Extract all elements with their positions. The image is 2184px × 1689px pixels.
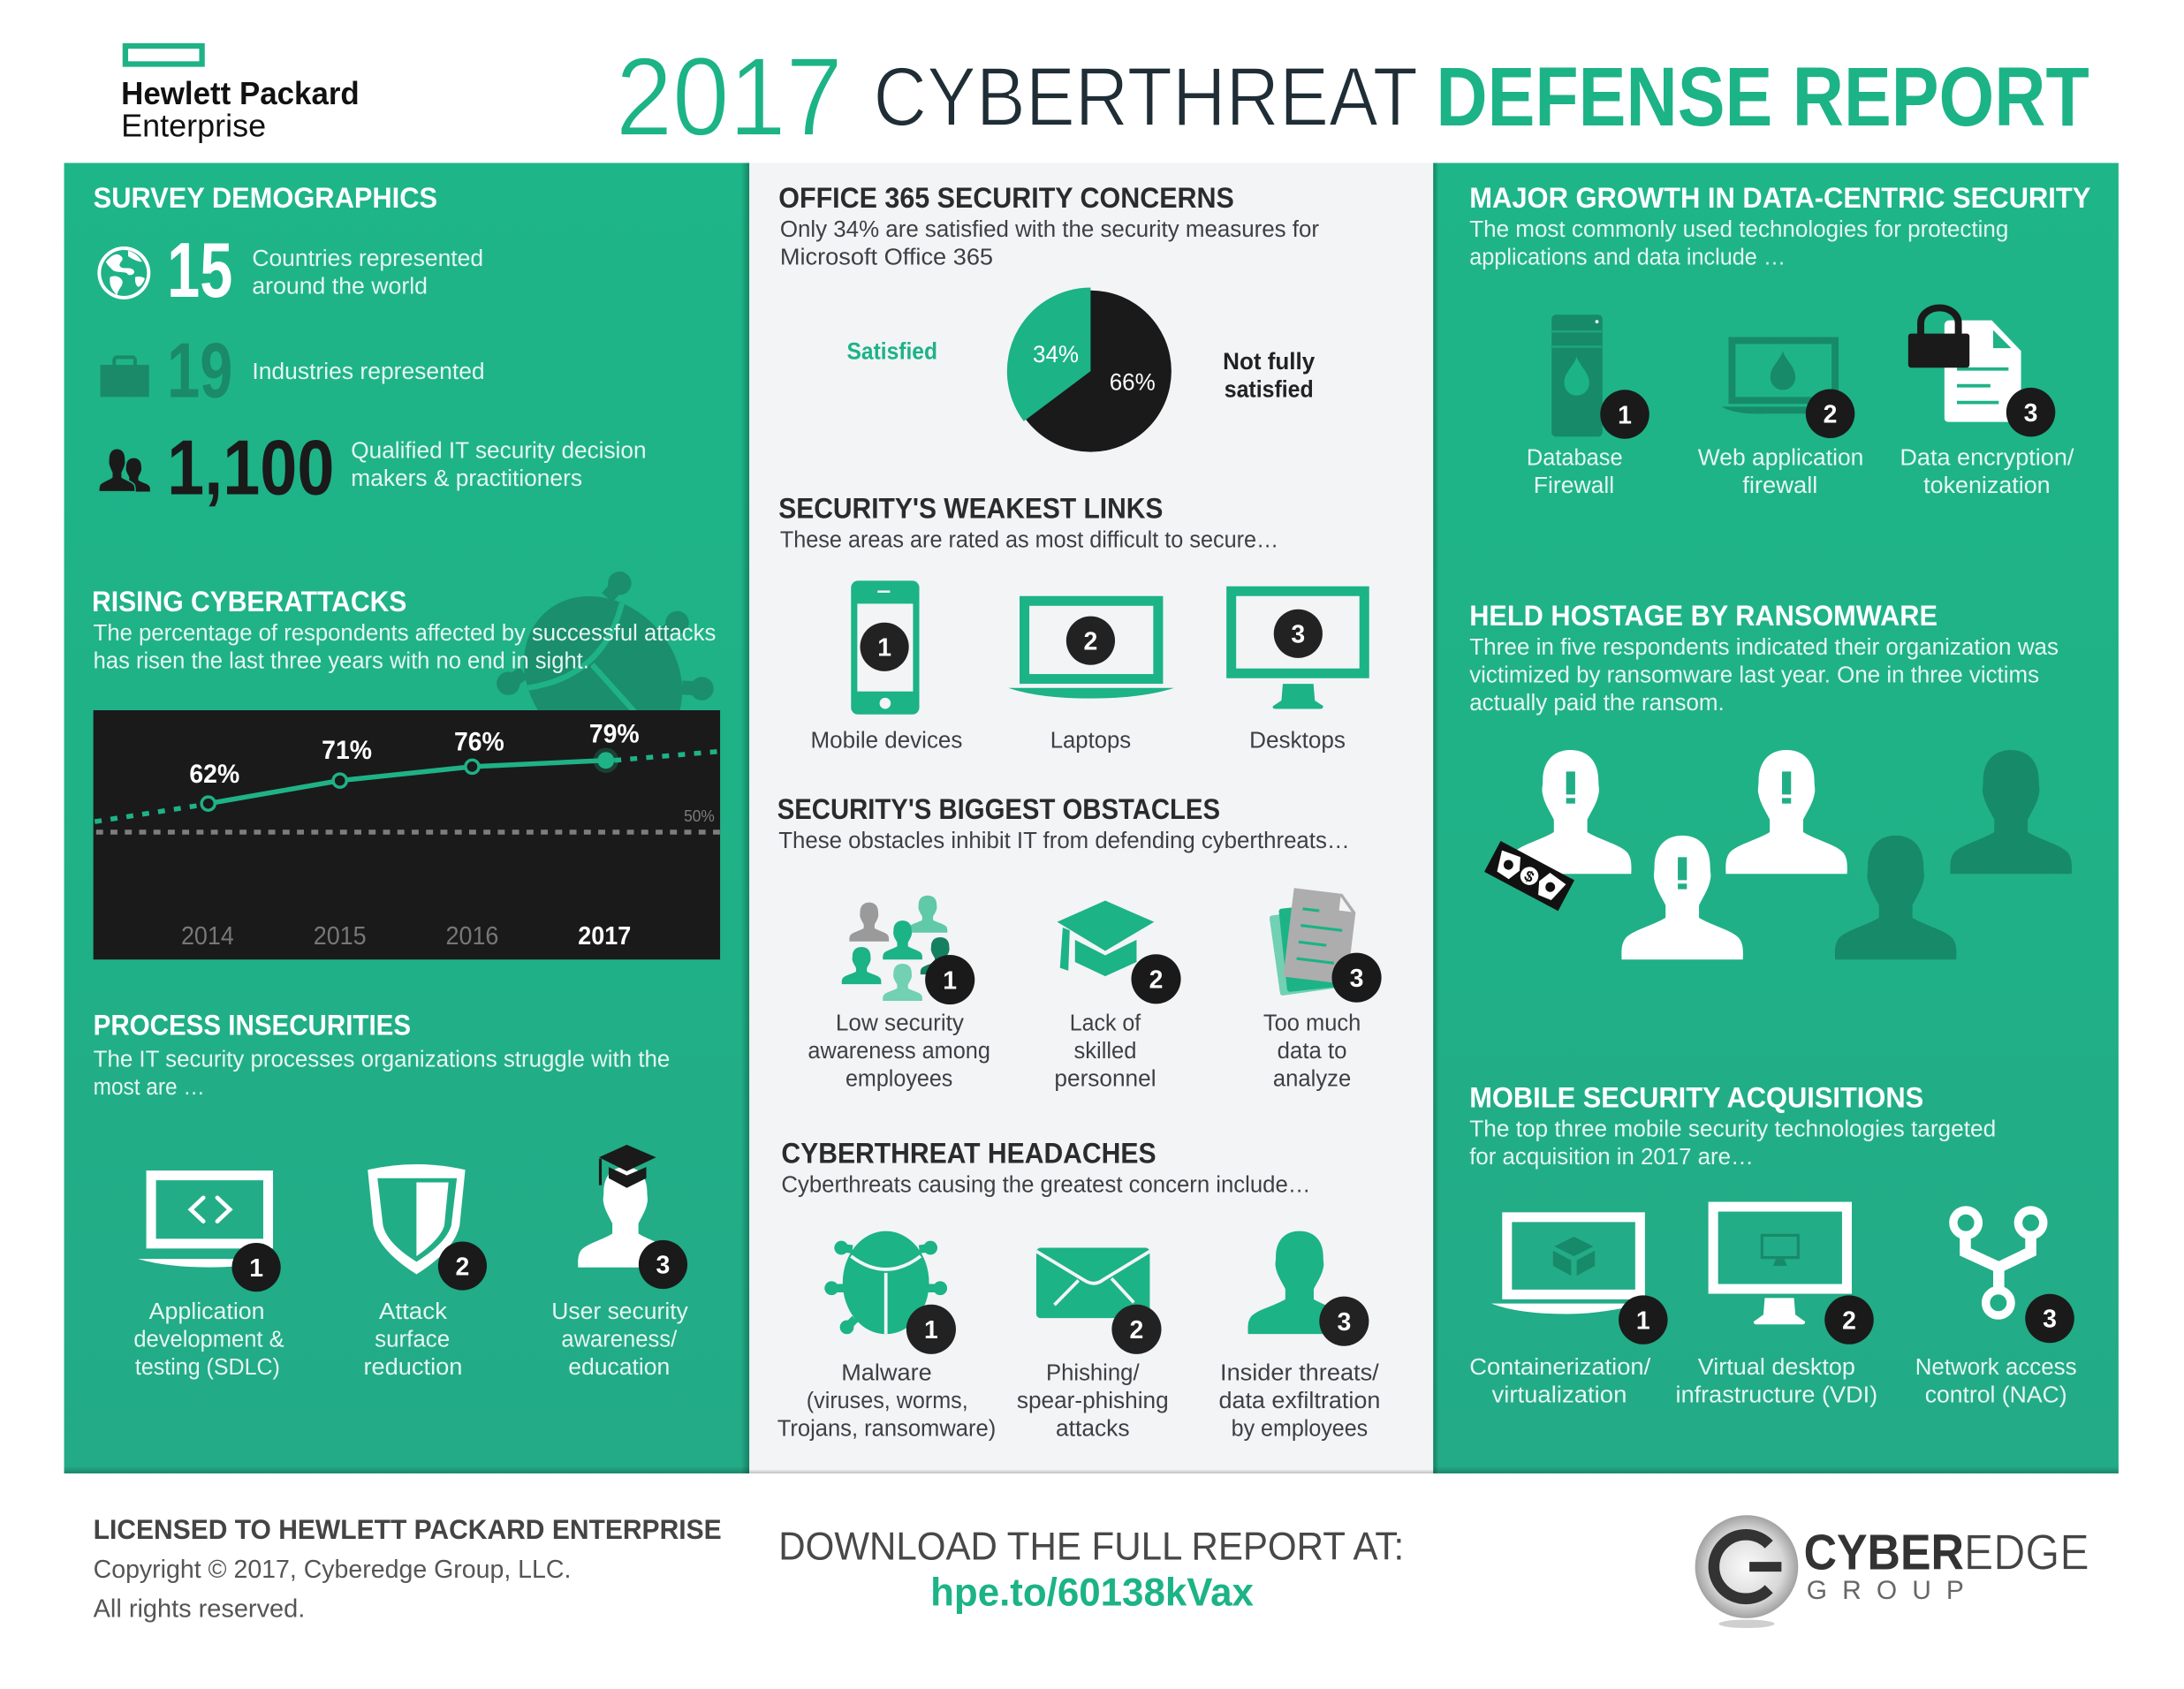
download call to action: hpe.to/60138kVax bbox=[930, 1572, 1254, 1615]
label: too much data: Too much bbox=[1263, 1010, 1361, 1036]
line chart: 2017 bbox=[578, 922, 631, 951]
logo: Cyberedge Group: EDGE bbox=[1964, 1526, 2089, 1581]
icon: laptop with container bbox=[1491, 1217, 1668, 1344]
pie chart: 66% bbox=[1110, 368, 1156, 395]
icon: encrypted document bbox=[1908, 307, 2055, 436]
logo: Cyberedge Group: GROUP bbox=[1807, 1576, 1964, 1605]
label: low security awareness bbox=[808, 1010, 990, 1092]
section: survey demographics bbox=[94, 182, 647, 511]
text block: Three in five respondents indicated their organization was bbox=[1469, 633, 2059, 660]
label: lack of skilled personnel bbox=[1054, 1010, 1156, 1092]
icon: documents bbox=[1270, 888, 1382, 1003]
icon: people victims bbox=[1510, 750, 2072, 959]
heading: MOBILE SECURITY ACQUISITIONS bbox=[1469, 1081, 1923, 1113]
icon: laptop: 2 bbox=[1084, 627, 1097, 655]
label: lack of skilled personnel: personnel bbox=[1054, 1065, 1156, 1092]
label: user security awareness: education bbox=[568, 1353, 670, 1380]
label: user security awareness: awareness/ bbox=[561, 1325, 678, 1352]
line chart: 50% bbox=[684, 807, 715, 825]
label: user security awareness: User security bbox=[551, 1298, 688, 1324]
text block: These obstacles inhibit IT from defending cyberthreats… bbox=[778, 827, 1350, 853]
label: insider threats: Insider threats/ bbox=[1220, 1359, 1380, 1385]
label: network access control: control (NAC) bbox=[1925, 1382, 2067, 1408]
heading: HELD HOSTAGE BY RANSOMWARE bbox=[1469, 600, 1938, 632]
label: malware: Trojans, ransomware) bbox=[777, 1414, 996, 1441]
stat: 15 countries: Countries represented bbox=[252, 245, 483, 271]
icon: briefcase bbox=[101, 357, 149, 397]
icon: money: $ bbox=[1521, 867, 1537, 886]
icon: encrypted document: 3 bbox=[2024, 399, 2037, 428]
label: malware: Malware bbox=[841, 1359, 932, 1385]
label: web application firewall: Web application bbox=[1698, 444, 1863, 471]
icon: envelope bbox=[1036, 1248, 1162, 1354]
text block: Microsoft Office 365 bbox=[780, 244, 993, 270]
label: application development bbox=[133, 1298, 284, 1380]
line chart: 79% bbox=[589, 719, 640, 748]
logo: Hewlett Packard Enterprise: Enterprise bbox=[121, 107, 266, 143]
panel: middle column bbox=[749, 163, 1433, 1473]
label: insider threats: by employees bbox=[1232, 1414, 1368, 1441]
label: low security awareness: Low security bbox=[836, 1010, 964, 1036]
label: attack surface reduction bbox=[363, 1298, 462, 1380]
text block: applications and data include … bbox=[1469, 244, 1786, 270]
icon: web application firewall bbox=[1722, 340, 1854, 438]
icon: employees bbox=[842, 896, 974, 1004]
label: application development: Application bbox=[149, 1298, 265, 1324]
heading: RISING CYBERATTACKS bbox=[92, 586, 406, 617]
label: not fully satisfied bbox=[1223, 348, 1315, 402]
icon: laptop code: 1 bbox=[249, 1254, 263, 1283]
label: lack of skilled personnel: skilled bbox=[1074, 1037, 1136, 1064]
icon: mobile: 1 bbox=[877, 634, 891, 663]
icon: laptop bbox=[1008, 601, 1174, 699]
download call to action bbox=[778, 1526, 1404, 1615]
text block: has risen the last three years with no end in sight. bbox=[94, 648, 589, 674]
license text: Copyright © 2017, Cyberedge Group, LLC. bbox=[94, 1556, 571, 1584]
label: data encryption: Data encryption/ bbox=[1900, 444, 2074, 471]
label: user security awareness bbox=[551, 1298, 688, 1380]
label: malware: (viruses, worms, bbox=[807, 1387, 968, 1413]
label: database firewall bbox=[1527, 444, 1623, 498]
stat: 1,100 practitioners: makers & practitioners bbox=[351, 465, 582, 491]
section: rising cyberattacks bbox=[92, 543, 738, 959]
panel: left column bbox=[64, 163, 749, 1473]
icon: network access control bbox=[1953, 1210, 2074, 1343]
label: phishing: Phishing/ bbox=[1046, 1359, 1140, 1385]
icon: malware bug: 1 bbox=[924, 1316, 938, 1344]
text block: The percentage of respondents affected by successful attacks bbox=[94, 619, 716, 646]
icon: insider person: 3 bbox=[1337, 1308, 1351, 1337]
text block: victimized by ransomware last year. One in three victims bbox=[1469, 661, 2039, 687]
section: office 365 bbox=[778, 182, 1319, 452]
logo: Hewlett Packard Enterprise bbox=[121, 46, 360, 143]
label: malware bbox=[777, 1359, 996, 1441]
icon: desktop bbox=[1232, 591, 1364, 708]
license text: All rights reserved. bbox=[94, 1594, 305, 1623]
download call to action: DOWNLOAD THE FULL REPORT AT: bbox=[778, 1526, 1404, 1569]
text block: These areas are rated as most difficult to secure… bbox=[780, 526, 1278, 553]
icon: laptop code bbox=[138, 1176, 281, 1291]
label: virtual desktop infrastructure: infrastructure (VDI) bbox=[1676, 1382, 1877, 1408]
label: web application firewall: firewall bbox=[1742, 472, 1817, 498]
label: virtual desktop infrastructure: Virtual desktop bbox=[1698, 1353, 1855, 1380]
heading: PROCESS INSECURITIES bbox=[94, 1009, 411, 1041]
section: mobile security acquisitions bbox=[1469, 1081, 2077, 1408]
label: laptops: Laptops bbox=[1050, 727, 1131, 754]
icon: envelope: 2 bbox=[1130, 1316, 1143, 1344]
stat: 15 countries: around the world bbox=[252, 273, 428, 299]
icon: desktop: 3 bbox=[1291, 621, 1305, 649]
label: attack surface reduction: Attack bbox=[379, 1298, 448, 1324]
label: database firewall: Firewall bbox=[1534, 472, 1614, 498]
header bbox=[121, 34, 2089, 159]
logo: Cyberedge Group bbox=[1695, 1515, 2089, 1628]
pie chart bbox=[1007, 288, 1172, 452]
line chart bbox=[94, 710, 720, 959]
line chart: 62% bbox=[189, 760, 239, 789]
heading: CYBERTHREAT HEADACHES bbox=[781, 1137, 1156, 1169]
text block bbox=[1469, 216, 2008, 270]
label: containerization: virtualization bbox=[1491, 1382, 1627, 1408]
icon: database firewall: 1 bbox=[1618, 401, 1632, 429]
icon: employees: 1 bbox=[943, 966, 957, 995]
icon: graduate: 3 bbox=[656, 1252, 670, 1280]
text block: Only 34% are satisfied with the security measures for bbox=[780, 216, 1319, 242]
heading: MAJOR GROWTH IN DATA-CENTRIC SECURITY bbox=[1469, 182, 2091, 214]
label: low security awareness: employees bbox=[846, 1065, 952, 1092]
icon: graduate bbox=[578, 1145, 687, 1289]
label: virtual desktop infrastructure bbox=[1676, 1353, 1877, 1408]
text block bbox=[94, 1046, 670, 1100]
icon: web application firewall: 2 bbox=[1824, 400, 1837, 428]
label: database firewall: Database bbox=[1527, 444, 1623, 471]
label: application development: testing (SDLC) bbox=[135, 1353, 280, 1380]
icon: database firewall bbox=[1551, 314, 1649, 439]
label: not fully satisfied: Not fully bbox=[1223, 348, 1315, 375]
label: network access control: Network access bbox=[1915, 1353, 2077, 1380]
icon: documents: 3 bbox=[1350, 965, 1363, 993]
label: insider threats bbox=[1218, 1359, 1380, 1441]
stat: 15 countries: 15 bbox=[167, 226, 232, 314]
label: containerization: Containerization/ bbox=[1469, 1353, 1651, 1380]
label: web application firewall bbox=[1698, 444, 1863, 498]
section: biggest obstacles bbox=[777, 793, 1382, 1092]
label: mobile devices: Mobile devices bbox=[811, 727, 962, 754]
stat: 19 industries bbox=[167, 326, 485, 413]
line chart: 71% bbox=[322, 736, 372, 765]
label: too much data: data to bbox=[1278, 1037, 1347, 1064]
heading: SECURITY'S WEAKEST LINKS bbox=[778, 492, 1163, 524]
icon: globe bbox=[97, 246, 150, 299]
stat: 1,100 practitioners bbox=[167, 424, 647, 511]
section: process insecurities bbox=[94, 1009, 688, 1380]
icon: graduation cap bbox=[1058, 901, 1181, 1004]
stat: 1,100 practitioners: 1,100 bbox=[167, 424, 334, 511]
line chart: 2016 bbox=[445, 922, 498, 951]
text block bbox=[94, 619, 716, 674]
icon: shield bbox=[368, 1164, 487, 1291]
heading: OFFICE 365 SECURITY CONCERNS bbox=[778, 182, 1234, 214]
license text bbox=[94, 1513, 722, 1623]
icon: malware bug bbox=[824, 1231, 956, 1354]
heading: SECURITY'S BIGGEST OBSTACLES bbox=[777, 793, 1220, 825]
heading: SURVEY DEMOGRAPHICS bbox=[94, 182, 437, 214]
label: desktops: Desktops bbox=[1249, 727, 1346, 754]
label: low security awareness: awareness among bbox=[808, 1037, 990, 1064]
line chart: 2014 bbox=[181, 922, 234, 951]
icon: insider person bbox=[1247, 1231, 1369, 1346]
section: ransomware bbox=[1469, 600, 2072, 959]
label: lack of skilled personnel: Lack of bbox=[1070, 1010, 1141, 1036]
stat: 19 industries: 19 bbox=[167, 326, 232, 413]
text block: for acquisition in 2017 are… bbox=[1469, 1143, 1754, 1170]
footer bbox=[94, 1513, 2089, 1628]
label: application development: development & bbox=[133, 1325, 284, 1352]
license text: LICENSED TO HEWLETT PACKARD ENTERPRISE bbox=[94, 1513, 722, 1545]
label: not fully satisfied: satisfied bbox=[1225, 375, 1314, 402]
icon: network access control: 3 bbox=[2043, 1306, 2057, 1334]
label: data encryption: tokenization bbox=[1923, 472, 2051, 498]
icon: mobile bbox=[851, 580, 920, 715]
text block bbox=[1469, 1115, 1996, 1170]
line chart: 76% bbox=[454, 728, 504, 757]
section: weakest links bbox=[778, 492, 1364, 754]
text block: The IT security processes organizations struggle with the bbox=[94, 1046, 670, 1072]
text block: most are … bbox=[94, 1073, 205, 1100]
text block: actually paid the ransom. bbox=[1469, 689, 1725, 716]
text block: The top three mobile security technologies targeted bbox=[1469, 1115, 1996, 1141]
icon: people bbox=[99, 449, 150, 492]
label: insider threats: data exfiltration bbox=[1218, 1387, 1380, 1413]
icon: virtual desktop bbox=[1713, 1207, 1874, 1344]
logo: Cyberedge Group: CYBER bbox=[1804, 1526, 1964, 1581]
text block: Cyberthreats causing the greatest concern include… bbox=[781, 1170, 1311, 1197]
title: CYBERTHREAT bbox=[873, 50, 1418, 144]
label: phishing bbox=[1017, 1359, 1169, 1441]
label: attack surface reduction: surface bbox=[375, 1325, 450, 1352]
icon: bug watermark bbox=[468, 543, 738, 810]
icon: laptop with container: 1 bbox=[1636, 1307, 1650, 1335]
label: containerization bbox=[1469, 1353, 1651, 1408]
text block bbox=[780, 216, 1319, 270]
stat: 1,100 practitioners: Qualified IT security decision bbox=[351, 437, 647, 464]
title: 2017 bbox=[616, 34, 843, 159]
icon: graduation cap: 2 bbox=[1149, 966, 1163, 995]
label: too much data: analyze bbox=[1273, 1065, 1351, 1092]
icon: shield: 2 bbox=[456, 1253, 469, 1281]
label: attack surface reduction: reduction bbox=[363, 1353, 462, 1380]
logo: Hewlett Packard Enterprise: Hewlett Packard bbox=[121, 75, 360, 111]
text block bbox=[1469, 633, 2059, 716]
line chart: 2015 bbox=[314, 922, 367, 951]
icon: money bbox=[1484, 841, 1574, 911]
label: phishing: spear-phishing bbox=[1017, 1387, 1169, 1413]
pie chart: 34% bbox=[1033, 341, 1079, 367]
title: DEFENSE REPORT bbox=[1436, 50, 2089, 144]
label: satisfied: Satisfied bbox=[847, 338, 937, 365]
label: network access control bbox=[1915, 1353, 2077, 1408]
section: cyberthreat headaches bbox=[777, 1137, 1380, 1441]
section: data-centric security bbox=[1469, 182, 2091, 498]
panel: right column bbox=[1433, 163, 2119, 1473]
title bbox=[616, 34, 2089, 159]
label: phishing: attacks bbox=[1056, 1414, 1130, 1441]
text block: The most commonly used technologies for protecting bbox=[1469, 216, 2008, 242]
icon: virtual desktop: 2 bbox=[1842, 1307, 1856, 1335]
stat: 19 industries: Industries represented bbox=[252, 358, 485, 384]
stat: 15 countries bbox=[167, 226, 483, 314]
label: data encryption bbox=[1900, 444, 2074, 498]
label: too much data bbox=[1263, 1010, 1361, 1092]
